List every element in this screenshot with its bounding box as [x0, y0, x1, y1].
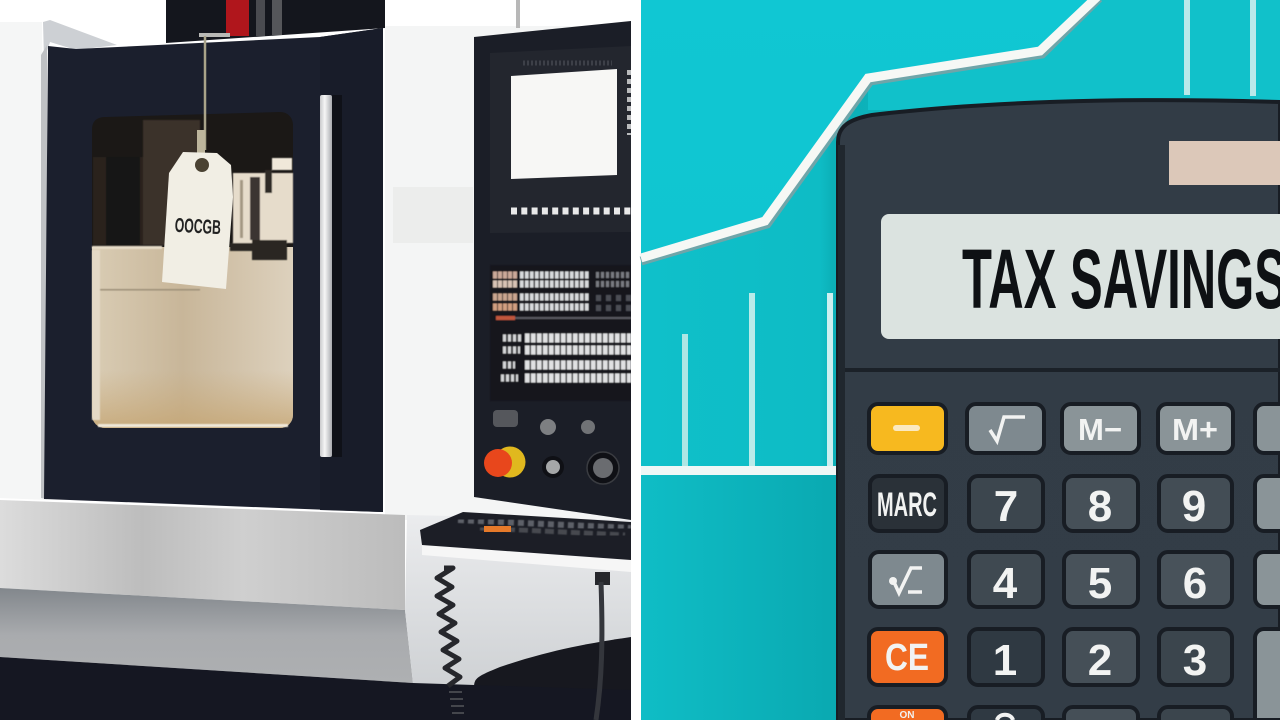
key: 6: 6: [1183, 559, 1207, 608]
key: M minus: M−: [1078, 412, 1122, 447]
lighter teal above trend right side: [868, 0, 1280, 110]
status strip: [496, 316, 515, 320]
cabinet right section: [320, 28, 383, 512]
key: 1: 1: [993, 636, 1017, 685]
machine window: [92, 112, 293, 428]
key: 3: 3: [1183, 636, 1207, 685]
key: M minus: [1062, 404, 1139, 453]
control panel: [474, 21, 631, 520]
key: 2: 2: [1088, 636, 1112, 685]
side panel edge: [41, 45, 47, 499]
key: 0 top: [969, 707, 1043, 720]
key: MARC: [870, 476, 946, 531]
keypad block upper: [490, 265, 631, 401]
calculator: [838, 100, 1280, 720]
keyboard shelf: [420, 512, 631, 572]
key: CE: CE: [885, 637, 929, 679]
key: bottom third: [1064, 707, 1138, 720]
key: 6: [1159, 552, 1232, 608]
left white side panel: [0, 22, 47, 500]
key: orange bottom: [869, 707, 946, 720]
key: right column third: [1255, 552, 1280, 607]
speckled wall patch: [393, 187, 473, 243]
key: 8: [1064, 476, 1138, 531]
screen: [511, 69, 617, 179]
keypad divider: [845, 368, 1280, 372]
key: 9: [1159, 476, 1232, 531]
key: root with dash: [870, 552, 946, 607]
coiled cable: [437, 568, 464, 713]
chart vertical bars: [682, 0, 1256, 466]
key: CE: [869, 629, 946, 685]
key: 8: 8: [1088, 482, 1112, 531]
key: 5: [1064, 552, 1138, 608]
side button strip: [627, 70, 631, 135]
panel knobs: [493, 410, 619, 484]
top machine unit: [166, 0, 385, 43]
key: MARC: MARC: [877, 486, 937, 524]
calculator body: [838, 100, 1280, 720]
divider: [631, 0, 641, 720]
key: right column top: [1255, 404, 1280, 453]
key: 5: 5: [1088, 559, 1112, 608]
tag string: [204, 36, 206, 150]
key: 4: [969, 552, 1043, 608]
bezel label: [523, 60, 612, 66]
key: 3: [1159, 629, 1232, 685]
top wall stem: [516, 0, 520, 28]
chart baseline: [641, 466, 838, 475]
straight cable: [595, 572, 610, 720]
key: right column second: [1255, 476, 1280, 531]
door handle: [320, 95, 342, 457]
price tag: [162, 36, 233, 289]
key: 7: 7: [994, 482, 1018, 531]
shaded teal below trend line: [641, 0, 1280, 720]
trend line shadow: [641, 0, 1099, 261]
panel: CNC machine photo: [0, 0, 631, 720]
emergency stop button: [484, 446, 526, 478]
key: 7: [969, 476, 1043, 531]
panel: teal chart background: [641, 0, 1280, 720]
key: M plus: M+: [1172, 412, 1218, 447]
keypad block lower: [501, 338, 522, 378]
lower wall: [405, 515, 631, 720]
grey base panel: [0, 588, 413, 683]
screen bezel: [490, 46, 631, 233]
display: [881, 214, 1280, 339]
key: tall right column: [1255, 629, 1280, 720]
key: 1: [969, 629, 1043, 685]
key: square root: [967, 404, 1044, 453]
lower teal area: [641, 475, 838, 720]
keypad: [869, 404, 1280, 720]
white wall column: [385, 26, 631, 520]
tag card: [162, 152, 233, 289]
machine cabinet door: [44, 28, 383, 512]
tag label: OOCGB: [174, 215, 221, 239]
window upper dark area: [92, 112, 293, 247]
key: 9: 9: [1182, 482, 1206, 531]
calculator side edge: [838, 145, 845, 720]
machine interior: [92, 120, 293, 427]
key: 4: 4: [993, 559, 1018, 608]
gold lower glow: [92, 370, 293, 428]
key: yellow minus: [869, 404, 946, 453]
key: 2: [1064, 629, 1138, 685]
dark curved base: [474, 637, 631, 720]
silver lower band: [0, 500, 405, 610]
key: bottom fourth: [1159, 707, 1232, 720]
taupe solar panel: [1169, 141, 1280, 185]
angled side wedge: [43, 20, 117, 60]
soft key row: [511, 208, 631, 214]
rising trend line: [641, 0, 1097, 258]
dark floor plinth: [0, 657, 631, 720]
key: M plus: [1158, 404, 1233, 453]
